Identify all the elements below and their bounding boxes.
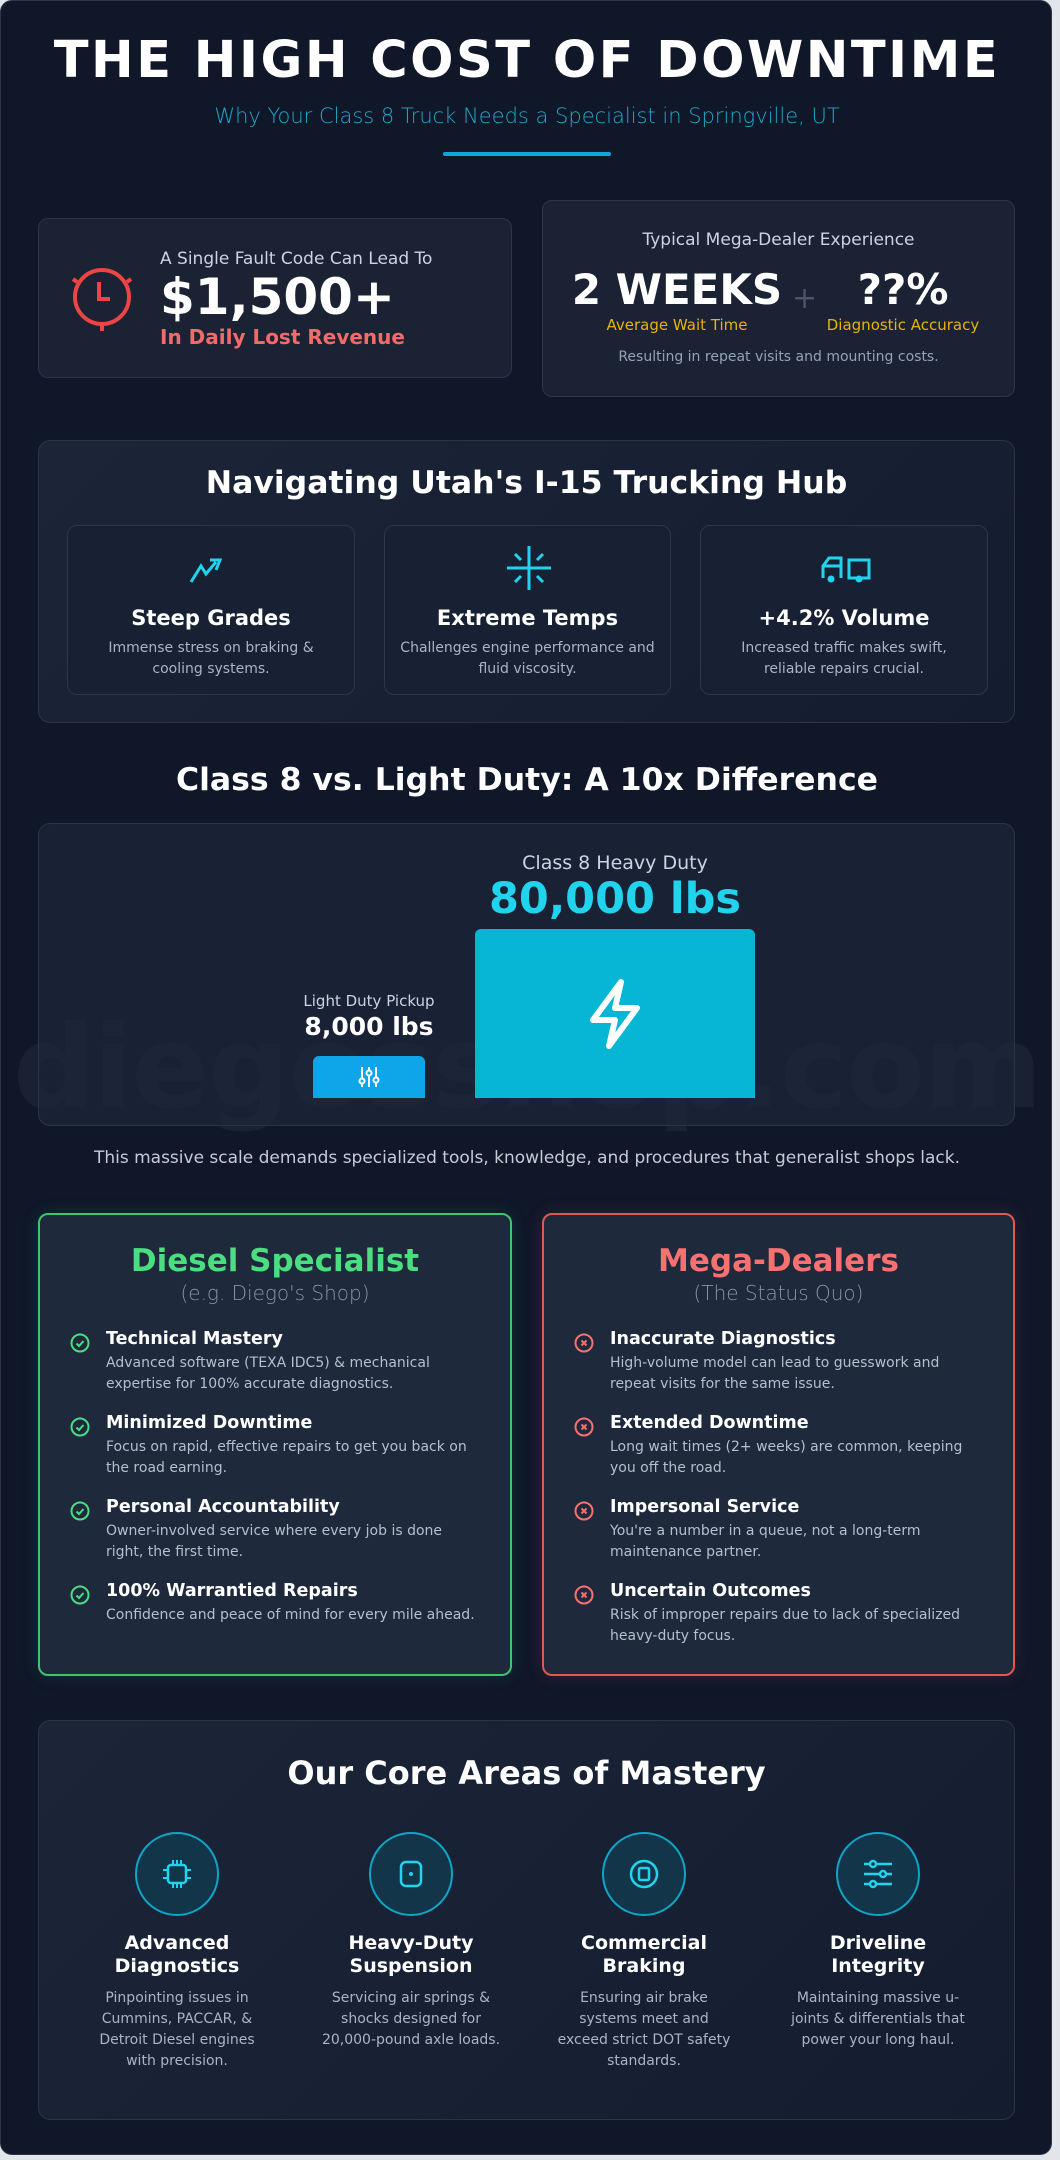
item: You're a number in a queue, not a long-term maintenance partner. xyxy=(610,1523,921,1560)
core: driveline: Driveline xyxy=(830,1932,926,1954)
panel: diesel specialist xyxy=(38,1213,512,1676)
core: diagnostics xyxy=(99,1832,255,2069)
caption: This massive scale demands specialized tools, knowledge, and procedures that generalist shops lack. xyxy=(94,1148,960,1168)
bar: class 8: 80,000 lbs xyxy=(489,874,741,924)
item: Advanced software (TEXA IDC5) & mechanical expertise for 100% accurate diagnostics. xyxy=(106,1355,430,1392)
bar: class 8 xyxy=(475,852,755,1098)
stat: accuracy: ??% xyxy=(858,265,948,314)
core: braking xyxy=(558,1832,730,2069)
sub: extreme temps: Extreme Temps xyxy=(437,606,618,630)
core: diagnostics: Advanced xyxy=(125,1932,229,1954)
stat: wait: 2 WEEKS xyxy=(572,265,782,314)
heading: Our Core Areas of Mastery xyxy=(287,1754,766,1792)
core: driveline: Maintaining massive u-joints & differentials that power your long haul. xyxy=(791,1990,965,2048)
sub: volume: Increased traffic makes swift, reliable repairs crucial. xyxy=(741,640,947,677)
text: revenue: $1,500+ xyxy=(160,268,395,326)
panel: weight bar chart xyxy=(38,823,1015,1126)
item: Minimized Downtime xyxy=(106,1413,312,1433)
heading: Diesel Specialist xyxy=(131,1243,419,1279)
stat: accuracy xyxy=(827,265,979,334)
icon: square xyxy=(369,1832,453,1916)
item: Inaccurate Diagnostics xyxy=(610,1329,836,1349)
text: revenue xyxy=(160,249,432,349)
item: Confidence and peace of mind for every mile ahead. xyxy=(106,1607,475,1623)
sub: volume: +4.2% Volume xyxy=(759,606,929,630)
sub: volume xyxy=(700,525,988,695)
item: Focus on rapid, effective repairs to get you back on the road earning. xyxy=(106,1439,467,1476)
core: suspension xyxy=(322,1832,500,2048)
item: High-volume model can lead to guesswork and repeat visits for the same issue. xyxy=(610,1355,939,1392)
item: 100% Warrantied Repairs xyxy=(106,1581,358,1601)
core: braking: Braking xyxy=(603,1955,685,1977)
core: suspension: Suspension xyxy=(350,1955,472,1977)
item xyxy=(70,1497,442,1560)
icon: brake xyxy=(602,1832,686,1916)
plus: + xyxy=(792,281,817,316)
text: revenue: A Single Fault Code Can Lead To xyxy=(160,249,432,269)
bar: class 8: Class 8 Heavy Duty xyxy=(522,852,708,874)
core: driveline xyxy=(790,1832,965,2048)
bar: light duty xyxy=(303,992,435,1098)
card: lost revenue xyxy=(38,218,512,378)
item xyxy=(574,1581,960,1644)
item xyxy=(574,1329,939,1392)
sub: steep grades xyxy=(67,525,355,695)
item xyxy=(574,1497,921,1560)
icon: chip xyxy=(135,1832,219,1916)
item: Impersonal Service xyxy=(610,1497,799,1517)
item: Technical Mastery xyxy=(106,1329,283,1349)
icon: trend xyxy=(190,558,222,583)
panel: mega-dealers xyxy=(542,1213,1015,1676)
item xyxy=(70,1413,467,1476)
icon: clock xyxy=(72,268,132,331)
stat: wait: Average Wait Time xyxy=(607,316,747,334)
heading: Typical Mega-Dealer Experience xyxy=(642,230,915,250)
heading: class 8 vs light duty: Class 8 vs. Light Duty: A 10x Difference xyxy=(176,762,878,798)
bar: light duty: 8,000 lbs xyxy=(304,1012,434,1041)
heading: Navigating Utah's I-15 Trucking Hub xyxy=(206,465,847,501)
heading: Mega-Dealers xyxy=(658,1243,899,1279)
item xyxy=(70,1329,430,1392)
panel: core areas xyxy=(38,1720,1015,2120)
icon: snowflake xyxy=(507,546,551,590)
item: Long wait times (2+ weeks) are common, keeping you off the road. xyxy=(610,1439,962,1476)
core: driveline: Integrity xyxy=(831,1955,925,1977)
item: Owner-involved service where every job is done right, the first time. xyxy=(106,1523,442,1560)
icon: sliders xyxy=(836,1832,920,1916)
core: suspension: Heavy-Duty xyxy=(348,1932,474,1954)
stat: accuracy: Diagnostic Accuracy xyxy=(827,316,979,334)
panel: I-15 hub xyxy=(38,440,1015,723)
text: revenue: In Daily Lost Revenue xyxy=(160,325,405,349)
sub: extreme temps: Challenges engine performance and fluid viscosity. xyxy=(400,640,655,677)
sub: extreme temps xyxy=(384,525,671,695)
watermark: diegosshop.com xyxy=(13,1001,1042,1134)
core: suspension: Servicing air springs & shocks designed for 20,000-pound axle loads. xyxy=(322,1990,500,2048)
sub: steep grades: Steep Grades xyxy=(131,606,291,630)
card: mega-dealer experience xyxy=(542,200,1015,397)
core: braking: Commercial xyxy=(581,1932,707,1954)
item: Extended Downtime xyxy=(610,1413,809,1433)
bar: light duty: Light Duty Pickup xyxy=(303,992,435,1010)
item xyxy=(574,1413,962,1476)
core: diagnostics: Pinpointing issues in Cummins, PACCAR, & Detroit Diesel engines with precision. xyxy=(99,1990,255,2069)
subtitle: Why Your Class 8 Truck Needs a Specialist in Springville, UT xyxy=(214,104,840,128)
note: Resulting in repeat visits and mounting costs. xyxy=(618,349,939,365)
item: Personal Accountability xyxy=(106,1497,340,1517)
icon: traffic xyxy=(822,556,870,582)
item xyxy=(70,1581,475,1623)
subheading: (The Status Quo) xyxy=(694,1281,863,1305)
title: THE HIGH COST OF DOWNTIME xyxy=(54,31,1000,90)
core: diagnostics: Diagnostics xyxy=(115,1955,239,1977)
item: Uncertain Outcomes xyxy=(610,1581,811,1601)
sub: steep grades: Immense stress on braking & cooling systems. xyxy=(108,640,314,677)
divider accent xyxy=(443,152,611,156)
subheading: (e.g. Diego's Shop) xyxy=(180,1281,370,1305)
item: Risk of improper repairs due to lack of specialized heavy-duty focus. xyxy=(610,1607,960,1644)
core: braking: Ensuring air brake systems meet and exceed strict DOT safety standards. xyxy=(558,1990,730,2069)
